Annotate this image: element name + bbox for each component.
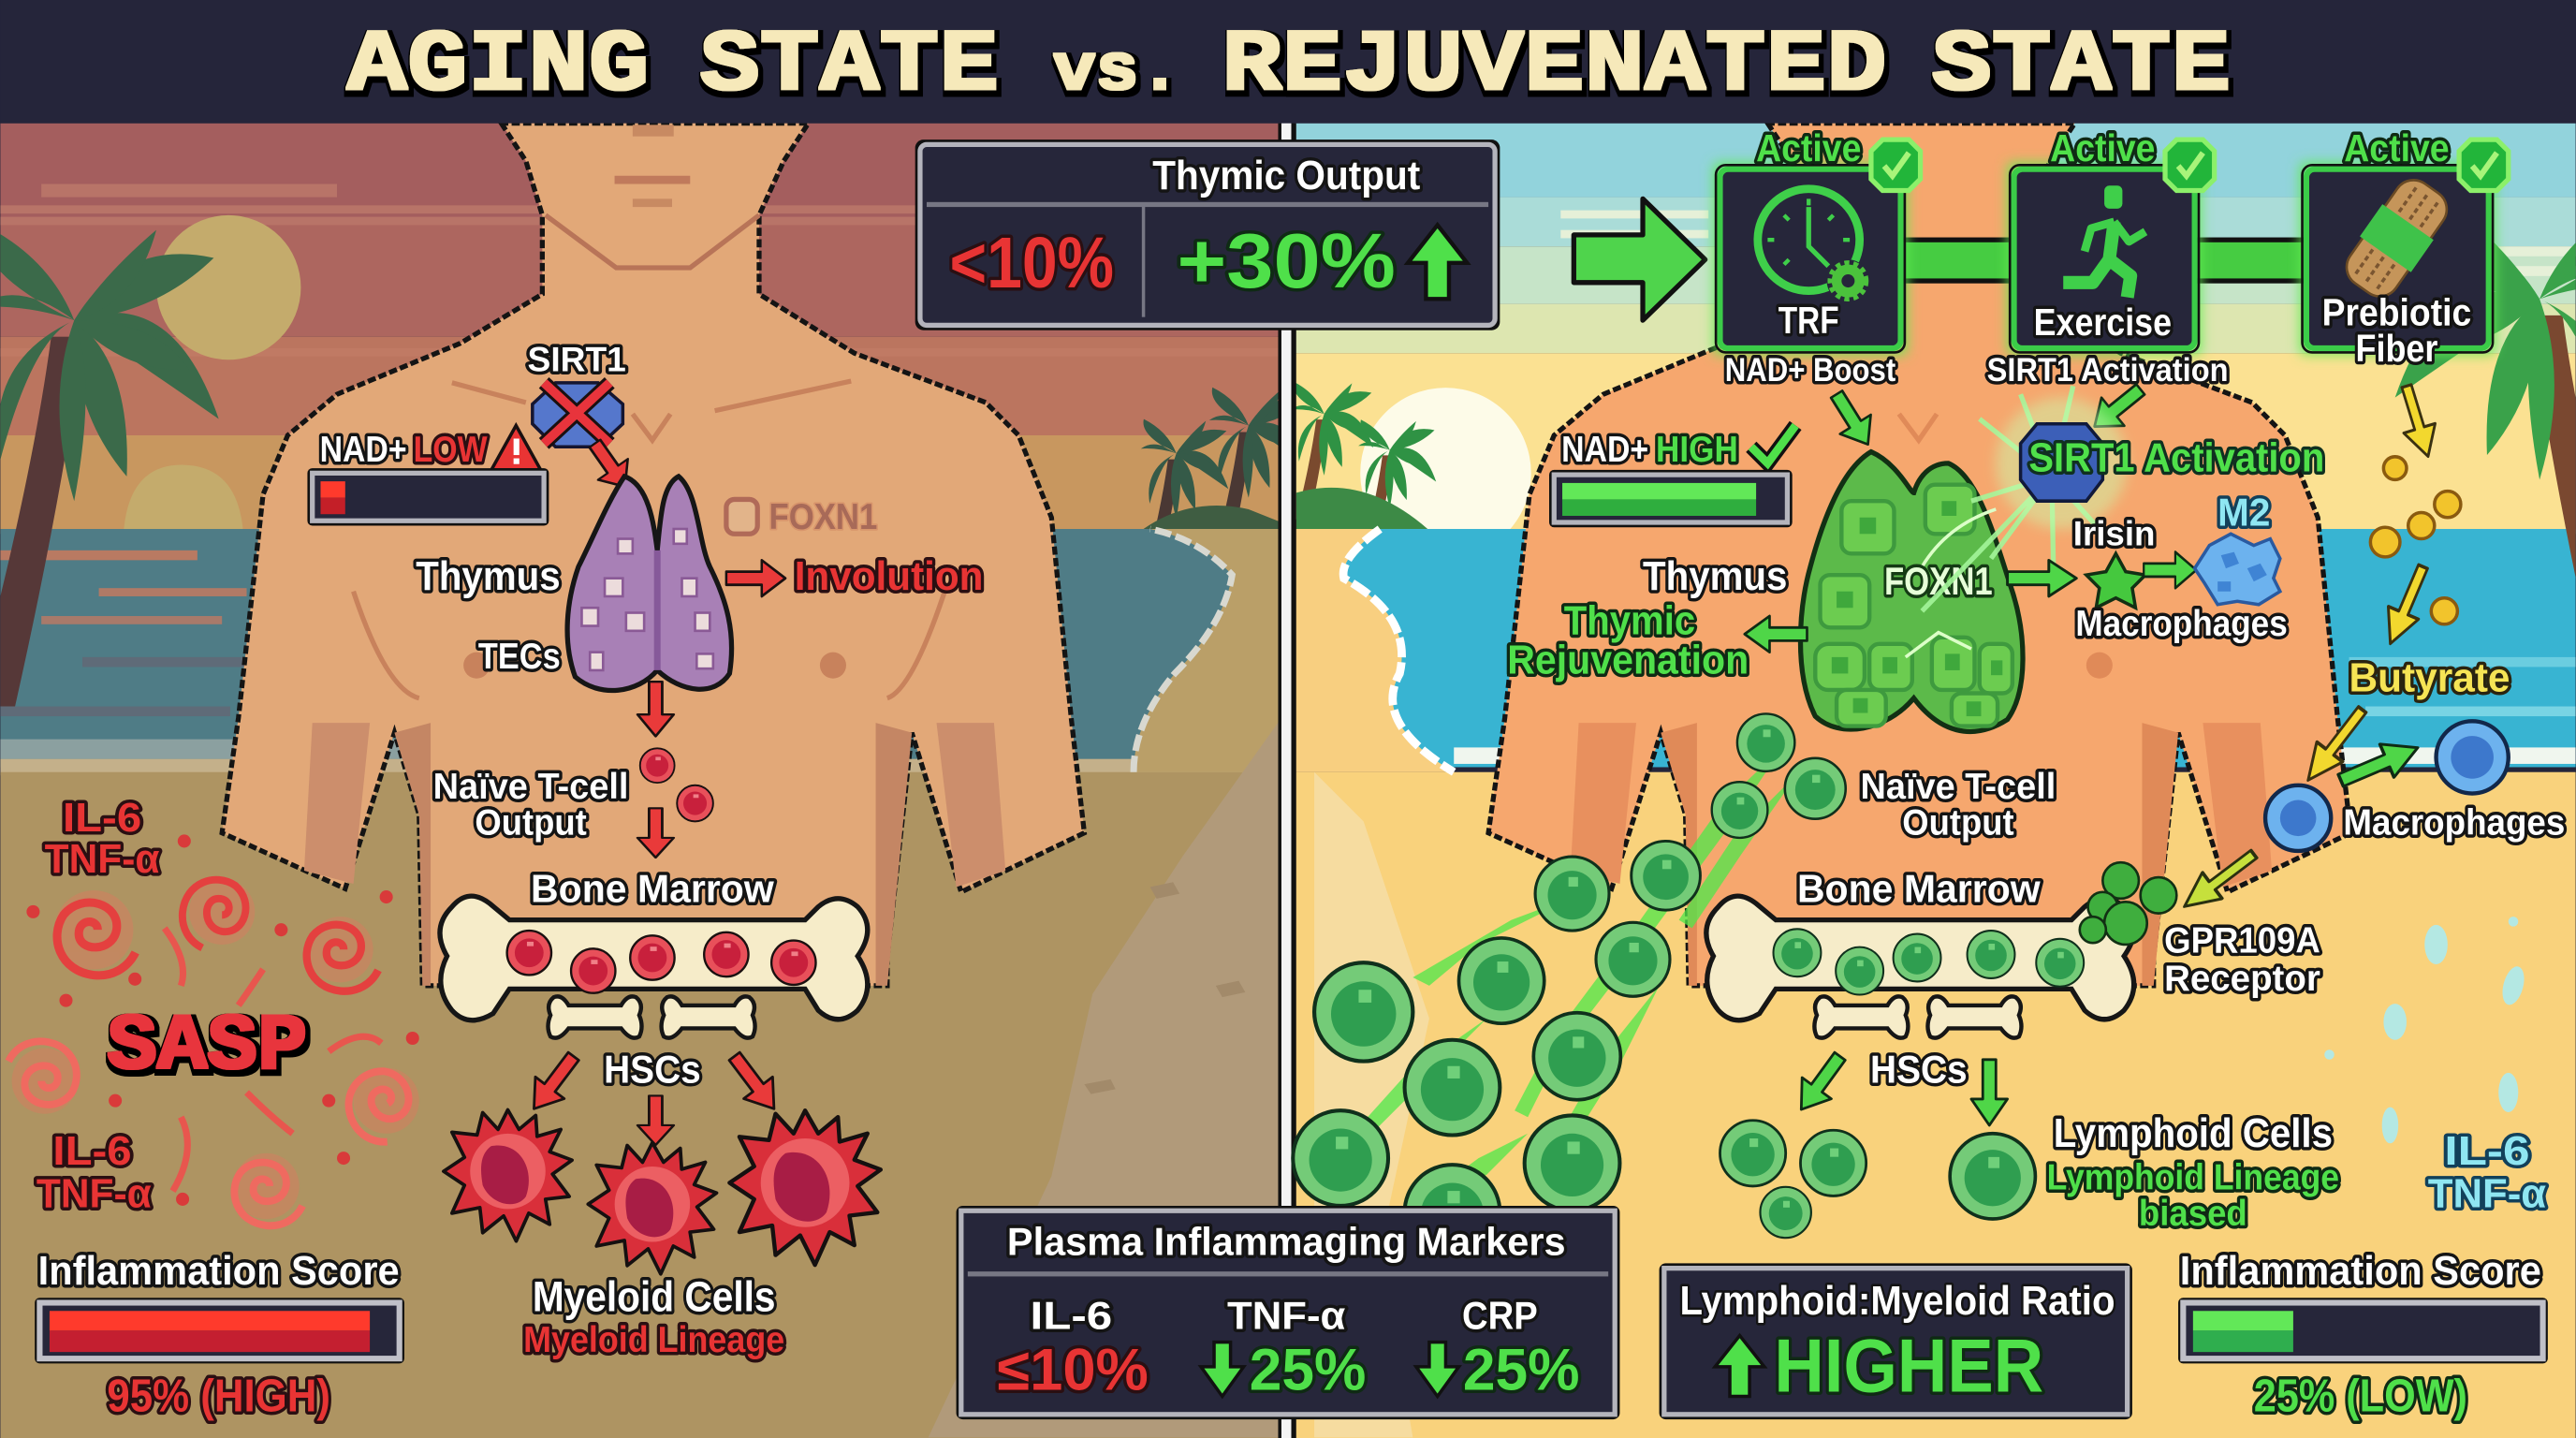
label: Bone Marrow (aging): Bone Marrow xyxy=(531,866,774,910)
inflammation score: aging xyxy=(35,1248,404,1421)
label: Thymus: Thymus xyxy=(416,553,561,599)
panel: thymic output xyxy=(915,139,1500,330)
panel: plasma inflammaging markers: IL-6 xyxy=(1031,1294,1112,1338)
interventions row: Active xyxy=(1756,126,1861,169)
rejuvenated: NAD+ high gauge xyxy=(1549,425,1795,527)
icon: M2 macrophage xyxy=(2195,534,2280,605)
label: IL-6 TNF-alpha right: IL-6 xyxy=(2444,1128,2530,1174)
card: prebiotic fiber xyxy=(2303,165,2493,370)
icon: clock with gear xyxy=(1758,189,1869,302)
panel: plasma inflammaging markers: Plasma Inflammaging Markers xyxy=(1007,1220,1566,1264)
panel: plasma inflammaging markers xyxy=(957,1206,1619,1419)
title banner: STATE xyxy=(1932,17,2231,115)
icon: myeloid cells xyxy=(444,1109,881,1274)
SASP cloud: TNF-α xyxy=(37,1171,152,1217)
icon: check badges xyxy=(1871,139,2509,191)
label: lymphoid cells: biased xyxy=(2139,1194,2247,1234)
label: FOXN1 off xyxy=(726,497,877,537)
SASP cloud: SASP xyxy=(107,1004,307,1093)
arrow: irisin to M2 xyxy=(2144,552,2196,588)
body: rejuvenated torso xyxy=(1488,124,2350,986)
aging: NAD+ low gauge: NAD+ xyxy=(320,430,407,470)
arrow: FOXN1 to Irisin xyxy=(2008,560,2076,596)
icon: fiber bundle xyxy=(2336,170,2457,306)
arrows: HSC to lymphoid xyxy=(1787,1046,2008,1125)
panel: plasma inflammaging markers: 25% xyxy=(1250,1337,1366,1402)
icon: up arrow ratio xyxy=(1715,1336,1764,1397)
SASP cloud: IL-6 xyxy=(63,795,141,841)
label: FOXN1 off: FOXN1 xyxy=(769,497,877,537)
arrows: HSC to myeloid xyxy=(520,1046,788,1145)
card: exercise: Exercise xyxy=(2034,301,2172,344)
label: myeloid cells: Myeloid Cells xyxy=(533,1272,776,1320)
SIRT1 activation burst xyxy=(1922,386,2324,611)
cytokine wisps: reduced xyxy=(2324,917,2528,1143)
panel: lymphoid myeloid ratio: HIGHER xyxy=(1774,1324,2043,1408)
panel: thymic output: +30% xyxy=(1178,218,1396,304)
icon: red T cells xyxy=(640,748,713,821)
title banner: AGING xyxy=(347,17,649,115)
card: TRF: TRF xyxy=(1778,299,1839,342)
label: Thymus (rejuvenated): Thymus xyxy=(1643,553,1787,599)
label: HSCs (rejuvenated): HSCs xyxy=(1870,1047,1968,1091)
label: TECs: TECs xyxy=(478,637,561,677)
icon: up arrow xyxy=(1408,225,1467,299)
arrow: thymic rejuvenation xyxy=(1745,616,1807,653)
title banner: vs. xyxy=(1053,36,1181,110)
icon: check xyxy=(1751,425,1795,463)
label: Naive T-cell output (aging): Output xyxy=(475,802,587,843)
icon: runner xyxy=(2063,185,2145,298)
background: rejuvenated beach scene xyxy=(1290,124,2576,1438)
label: Bone Marrow (rejuvenated): Bone Marrow xyxy=(1797,866,2041,910)
icon: SIRT1 inhibited: SIRT1 xyxy=(528,341,626,379)
card: TRF xyxy=(1716,165,1905,352)
butyrate pathway xyxy=(2174,381,2510,919)
arrow: T-cells to marrow xyxy=(637,808,674,858)
label: Naive T-cell output (aging) xyxy=(433,767,628,843)
label: IL-6 TNF-alpha right: TNF-α xyxy=(2428,1171,2546,1217)
SIRT1 activation burst: SIRT1 Activation xyxy=(2028,435,2324,481)
icon: irisin star xyxy=(2086,553,2145,608)
arrow: SIRT1 to thymus xyxy=(580,433,640,497)
arrow: thymus to T-cells xyxy=(637,682,674,736)
streaks: T cell flow xyxy=(1360,747,1799,1208)
arrow: NAD boost to thymus xyxy=(1822,385,1883,454)
icon: warning triangle xyxy=(491,425,541,470)
arrow: involution xyxy=(726,560,785,596)
label: GPR109A receptor: GPR109A xyxy=(2164,921,2320,961)
background: aging beach scene xyxy=(0,124,1307,1438)
title banner xyxy=(0,0,2576,124)
label: GPR109A receptor xyxy=(2164,921,2320,999)
panel: plasma inflammaging markers: CRP xyxy=(1462,1294,1538,1338)
label: Naive T-cell output (rejuvenated): Naïve T-cell xyxy=(1861,767,2056,807)
label: M2: M2 xyxy=(2217,491,2270,535)
icon: aging bone marrow xyxy=(440,896,868,1038)
label: Naive T-cell output (aging): Naïve T-cell xyxy=(433,767,628,807)
panel: thymic output: <10% xyxy=(950,223,1114,303)
label: myeloid cells xyxy=(523,1272,784,1360)
card: exercise xyxy=(2010,165,2199,352)
label: FOXN1 active: FOXN1 xyxy=(1884,559,1993,603)
label: Irisin: Irisin xyxy=(2073,515,2155,553)
card: prebiotic fiber: Fiber xyxy=(2356,327,2438,370)
label: Thymic Rejuvenation: Rejuvenation xyxy=(1507,637,1749,682)
inflammation score: rejuvenated xyxy=(2178,1248,2548,1421)
icon: down arrow TNF xyxy=(1201,1343,1244,1397)
inflammation score: aging: Inflammation Score xyxy=(38,1248,400,1294)
label: NAD+ Boost: NAD+ Boost xyxy=(1725,352,1896,389)
divider xyxy=(1278,124,1296,1438)
label: IL-6 TNF-alpha right xyxy=(2428,1128,2546,1217)
inflammation score: aging: 95% (HIGH) xyxy=(107,1371,330,1421)
label: Macrophages (M2): Macrophages xyxy=(2075,604,2288,644)
panel: plasma inflammaging markers: 25% xyxy=(1463,1337,1579,1402)
label: Involution: Involution xyxy=(795,553,983,599)
icon: aged thymus xyxy=(567,477,732,691)
arrow: into interventions xyxy=(1573,198,1705,320)
rejuvenated: NAD+ high gauge: NAD+ xyxy=(1561,430,1648,470)
rejuvenated: NAD+ high gauge: HIGH xyxy=(1656,430,1738,470)
interventions row xyxy=(1716,126,2509,370)
inflammation score: rejuvenated: Inflammation Score xyxy=(2180,1248,2541,1294)
label: lymphoid cells xyxy=(2047,1110,2339,1234)
icon: GPR109A receptor cluster xyxy=(2080,862,2176,945)
interventions row: Active xyxy=(2050,126,2155,169)
label: lymphoid cells: Lymphoid Cells xyxy=(2054,1110,2333,1156)
label: Macrophages (right): Macrophages xyxy=(2343,802,2565,843)
label: Naive T-cell output (rejuvenated) xyxy=(1861,767,2056,843)
label: Thymic Rejuvenation: Thymic xyxy=(1564,597,1695,643)
label: Thymic Rejuvenation xyxy=(1507,597,1749,682)
title banner: STATE xyxy=(700,17,999,115)
label: Naive T-cell output (rejuvenated): Output xyxy=(1902,802,2014,843)
icon: down arrow CRP xyxy=(1416,1343,1458,1397)
icon: SIRT1 inhibited xyxy=(528,341,626,447)
label: myeloid cells: Myeloid Lineage xyxy=(523,1320,784,1360)
body: aging torso xyxy=(222,124,1084,986)
panel: plasma inflammaging markers: TNF-α xyxy=(1227,1294,1346,1338)
SASP cloud: IL-6 xyxy=(52,1128,132,1174)
icon: rejuvenated thymus xyxy=(1800,452,2023,731)
label: lymphoid cells: Lymphoid Lineage xyxy=(2047,1157,2339,1197)
SASP cloud xyxy=(8,795,425,1225)
panel: lymphoid myeloid ratio: Lymphoid:Myeloid Ratio xyxy=(1680,1278,2115,1324)
panel: plasma inflammaging markers: ≤10% xyxy=(997,1337,1149,1402)
panel: thymic output: Thymic Output xyxy=(1152,153,1421,198)
label: SIRT1 Activation small: SIRT1 Activation xyxy=(1987,352,2229,389)
arrow: SIRT1 activation xyxy=(2083,375,2152,441)
butyrate pathway: Butyrate xyxy=(2349,655,2510,701)
icon: macrophages blue xyxy=(2265,721,2509,851)
SASP cloud: TNF-α xyxy=(45,836,160,882)
cells: green T cell stream xyxy=(1293,713,1846,1260)
inflammation score: rejuvenated: 25% (LOW) xyxy=(2254,1371,2467,1421)
card: prebiotic fiber: Prebiotic xyxy=(2322,290,2471,333)
aging: NAD+ low gauge xyxy=(307,425,549,526)
interventions row: Active xyxy=(2344,126,2450,169)
aging: NAD+ low gauge: LOW xyxy=(414,430,488,470)
label: GPR109A receptor: Receptor xyxy=(2164,959,2320,999)
panel: lymphoid myeloid ratio xyxy=(1660,1263,2132,1419)
title banner: REJUVENATED xyxy=(1222,17,1887,115)
label: HSCs (aging): HSCs xyxy=(604,1047,701,1091)
icon: rejuvenated bone marrow xyxy=(1706,896,2134,1038)
icon: lymphoid cells xyxy=(1720,1121,2035,1238)
